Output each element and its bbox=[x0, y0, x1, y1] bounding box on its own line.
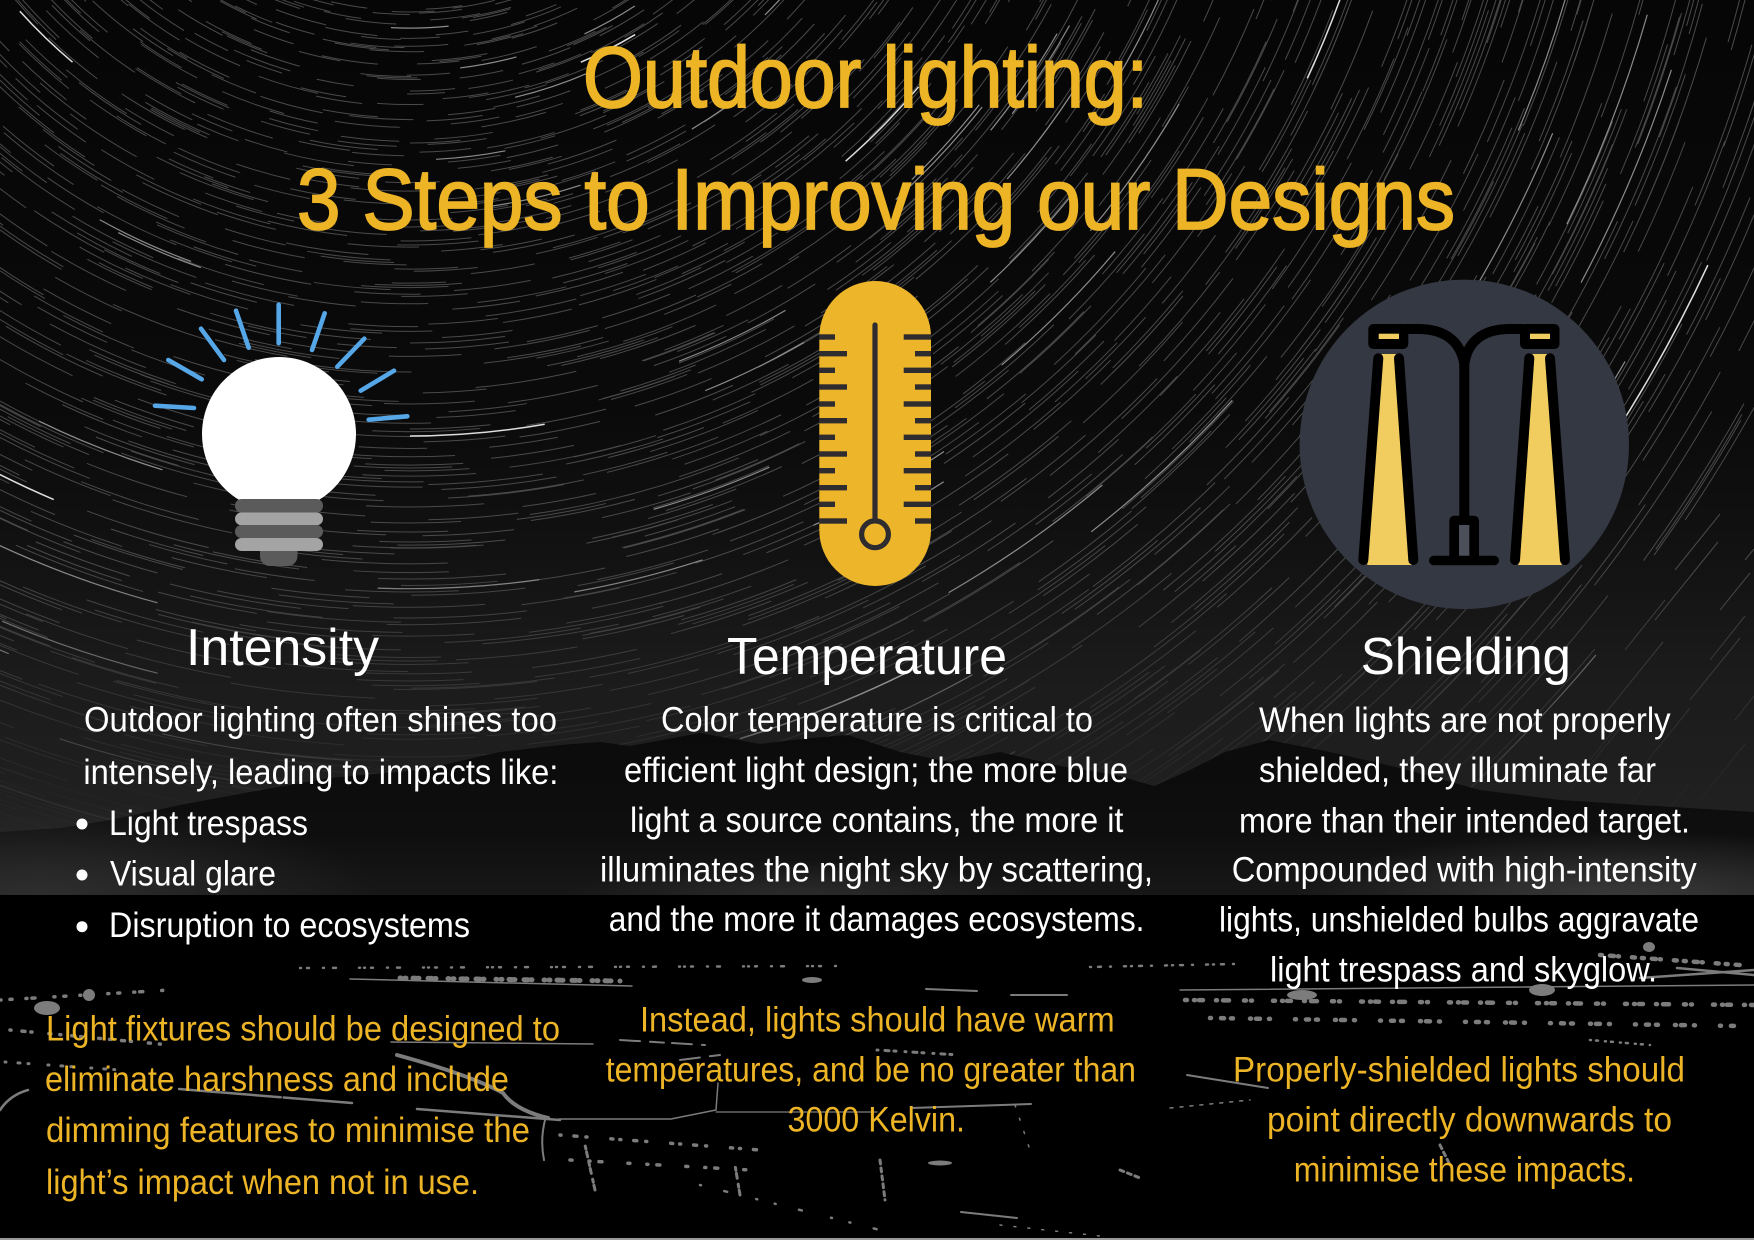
section: shielding bbox=[1219, 628, 1699, 1190]
shielding recommendation: point directly downwards to bbox=[1267, 1101, 1672, 1140]
shielding recommendation: Properly-shielded lights should bbox=[1233, 1051, 1685, 1090]
shielding body: shielded, they illuminate far bbox=[1259, 751, 1656, 790]
shielding body: more than their intended target. bbox=[1239, 802, 1690, 841]
star trails bbox=[0, 0, 1754, 820]
section: intensity bbox=[45, 619, 560, 1202]
temperature body: efficient light design; the more blue bbox=[624, 751, 1128, 790]
intensity impact list: Light trespass bbox=[109, 804, 308, 843]
lamp post bbox=[1368, 324, 1560, 565]
heading: intensity: Intensity bbox=[186, 619, 379, 677]
intensity body bbox=[83, 701, 558, 792]
shielding body bbox=[1219, 701, 1699, 990]
shielding body: lights, unshielded bulbs aggravate bbox=[1219, 901, 1699, 940]
title bbox=[297, 30, 1455, 248]
beam edges bbox=[1363, 358, 1565, 560]
light beams bbox=[1367, 354, 1562, 565]
thermometer ticks bbox=[819, 334, 931, 524]
horizon glow bbox=[0, 800, 1754, 990]
temperature recommendation: Instead, lights should have warm bbox=[640, 1001, 1115, 1040]
bulb base bbox=[235, 499, 323, 566]
intensity impact list: Visual glare bbox=[110, 855, 276, 894]
icon: light bulb bbox=[155, 305, 407, 566]
temperature body: Color temperature is critical to bbox=[661, 701, 1093, 740]
intensity body: Outdoor lighting often shines too bbox=[84, 701, 557, 740]
thermometer stem bbox=[862, 325, 888, 548]
intensity recommendation: eliminate harshness and include bbox=[45, 1060, 509, 1099]
temperature recommendation bbox=[606, 1001, 1136, 1140]
bulb glass bbox=[202, 357, 356, 500]
temperature recommendation: 3000 Kelvin. bbox=[788, 1101, 965, 1140]
title: Outdoor lighting: bbox=[583, 30, 1148, 126]
icon: thermometer bbox=[819, 281, 931, 586]
intensity impact list bbox=[76, 804, 470, 945]
temperature recommendation: temperatures, and be no greater than bbox=[606, 1051, 1136, 1090]
shielding recommendation: minimise these impacts. bbox=[1294, 1151, 1635, 1190]
intensity recommendation: Light fixtures should be designed to bbox=[46, 1010, 560, 1049]
shielding body: When lights are not properly bbox=[1259, 701, 1671, 740]
heading: shielding: Shielding bbox=[1361, 628, 1571, 686]
intensity body: intensely, leading to impacts like: bbox=[83, 753, 558, 792]
city lights bbox=[0, 942, 1754, 1236]
intensity impact list: Disruption to ecosystems bbox=[109, 906, 470, 945]
section: temperature bbox=[600, 628, 1153, 1140]
heading: temperature: Temperature bbox=[727, 628, 1007, 686]
intensity recommendation: light’s impact when not in use. bbox=[46, 1163, 479, 1202]
shielding recommendation bbox=[1233, 1051, 1685, 1190]
temperature body: and the more it damages ecosystems. bbox=[609, 900, 1144, 939]
shielding body: light trespass and skyglow. bbox=[1270, 951, 1657, 990]
intensity recommendation bbox=[45, 1010, 560, 1202]
title: 3 Steps to Improving our Designs bbox=[297, 152, 1455, 248]
mountain silhouette bbox=[0, 733, 1754, 900]
intensity recommendation: dimming features to minimise the bbox=[46, 1111, 530, 1150]
icon: shielded street lamp bbox=[1300, 280, 1629, 609]
temperature body: illuminates the night sky by scattering, bbox=[600, 851, 1153, 890]
shielding body: Compounded with high-intensity bbox=[1232, 851, 1697, 890]
bulb rays bbox=[155, 305, 407, 420]
temperature body: light a source contains, the more it bbox=[630, 801, 1124, 840]
temperature body bbox=[600, 701, 1153, 939]
